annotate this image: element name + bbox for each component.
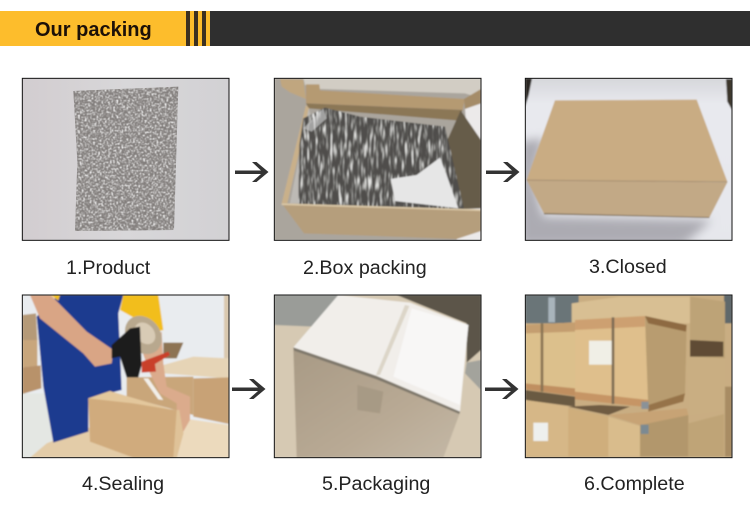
title: Our packing: [35, 19, 152, 41]
panel: closed box photo: [520, 78, 732, 245]
panel: packaging photo: [274, 295, 481, 458]
stacked boxes left: [22, 313, 37, 340]
bag of beads: [70, 85, 180, 233]
left crate: [526, 332, 575, 388]
tape roll: [124, 314, 162, 354]
arm: [30, 295, 113, 367]
box being sealed: [88, 391, 183, 458]
back crates: [572, 297, 690, 323]
label: step 3: 3.Closed: [589, 256, 667, 278]
label: step 2: 2.Box packing: [303, 257, 427, 279]
label: step 4: 4.Sealing: [82, 473, 164, 495]
panel: product photo: [22, 78, 229, 240]
tape strip: [143, 378, 163, 400]
metal corner: [641, 425, 649, 434]
yellow sleeve: [120, 295, 163, 332]
lower crates: [525, 400, 568, 457]
box inner walls: [447, 110, 481, 209]
label: step 1: 1.Product: [66, 257, 151, 279]
label: step 6: 6.Complete: [584, 473, 685, 495]
panel: wooden crates photo: [525, 295, 732, 458]
box lid flaps: [280, 79, 306, 99]
worker trousers: [37, 295, 123, 443]
background boxes right: [163, 343, 183, 358]
box top: [527, 100, 727, 182]
main crate: [574, 326, 648, 400]
arrow 1: [235, 162, 268, 182]
tape dispenser: [112, 327, 142, 377]
panel: sealing photo: [22, 295, 229, 458]
wrapped box top: [293, 295, 468, 412]
arrow 2: [486, 162, 520, 182]
forearm: [142, 332, 190, 432]
box front wall: [282, 203, 481, 239]
label on main crate: [589, 341, 612, 365]
panel: box packing photo: [274, 78, 481, 240]
bagged wire contents: [298, 108, 465, 209]
arrow 3: [232, 379, 266, 399]
label: step 5: 5.Packaging: [322, 473, 430, 495]
box shadow: [520, 138, 712, 245]
header banner: [0, 11, 750, 46]
arrow 4: [485, 379, 518, 399]
box front: [527, 180, 727, 218]
wrapped box front: [293, 348, 460, 458]
